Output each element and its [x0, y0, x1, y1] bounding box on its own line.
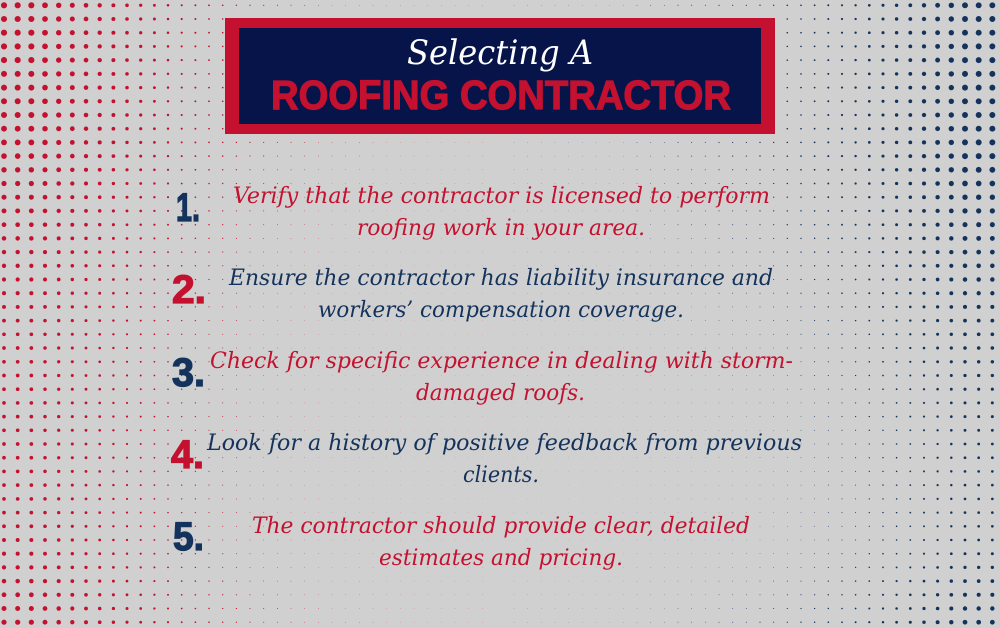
item 2 [172, 265, 773, 323]
red halftone dot pattern, left [4, 5, 483, 622]
number 1: 1. [176, 186, 200, 230]
item 1 text [233, 183, 770, 241]
item 4 text: clients. [463, 462, 539, 488]
banner navy panel [239, 28, 761, 124]
item 3 text: Check for specific experience in dealing with storm- [210, 348, 793, 374]
banner red frame [225, 18, 775, 134]
item 5 text: estimates and pricing. [379, 545, 623, 571]
item 4 text: Look for a history of positive feedback from previous [206, 430, 802, 456]
item 5 text: The contractor should provide clear, detailed [252, 513, 750, 539]
item 2 text: workers’ compensation coverage. [318, 297, 684, 323]
title line: Roofing Contractor: ROOFING CONTRACTOR [271, 72, 731, 118]
item 1 text: roofing work in your area. [357, 215, 645, 241]
item 4 text [206, 430, 802, 488]
number 4: 4. [171, 433, 204, 477]
number 5: 5. [173, 515, 204, 559]
item 3 text [210, 348, 793, 406]
item 1 text: Verify that the contractor is licensed to perform [233, 183, 770, 209]
item 5 text [252, 513, 750, 571]
item 1 [176, 183, 770, 241]
title line: Selecting A: Selecting A [407, 33, 593, 73]
navy halftone dot pattern, right [514, 5, 993, 622]
number 3: 3. [172, 351, 205, 395]
number 2: 2. [172, 268, 206, 312]
item 3 text: damaged roofs. [416, 380, 585, 406]
item 2 text [228, 265, 773, 323]
item 4 [171, 430, 802, 488]
title banner [225, 18, 775, 134]
item 5 [173, 513, 750, 571]
item 2 text: Ensure the contractor has liability insurance and [228, 265, 773, 291]
item 3 [172, 348, 793, 406]
